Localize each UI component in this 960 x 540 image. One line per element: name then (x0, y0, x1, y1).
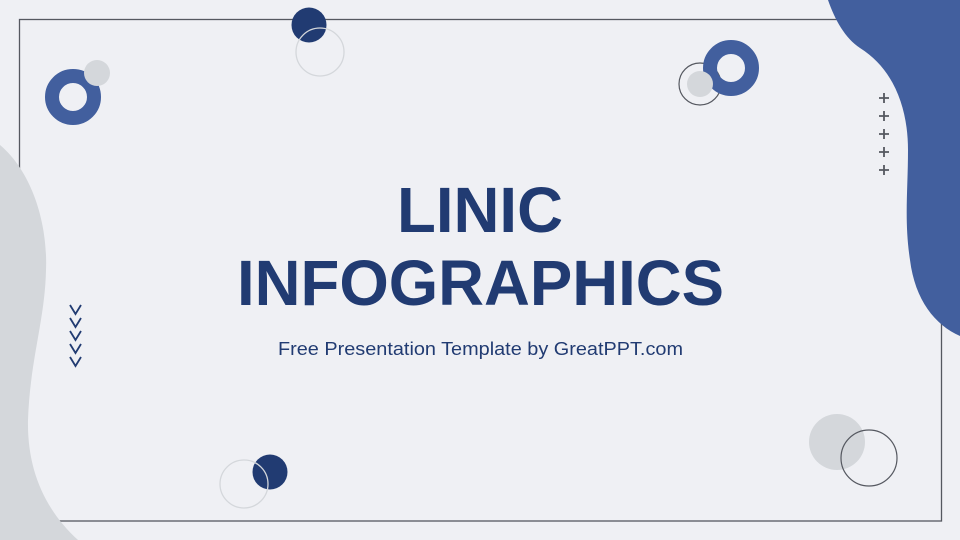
title (237, 174, 724, 319)
circles: top center (292, 8, 344, 76)
title: LINIC (397, 174, 563, 246)
blob: left gray (0, 145, 78, 540)
blob: right blue (828, 0, 960, 336)
ring: top left (52, 60, 110, 118)
circles: bottom right (809, 414, 897, 486)
circles: bottom left (220, 454, 288, 508)
ring: top right (679, 47, 752, 105)
subtitle: Free Presentation Template by GreatPPT.com (278, 339, 683, 359)
icon: chevrons down (70, 305, 81, 366)
title: INFOGRAPHICS (237, 247, 724, 319)
icon: plus column (879, 93, 889, 175)
